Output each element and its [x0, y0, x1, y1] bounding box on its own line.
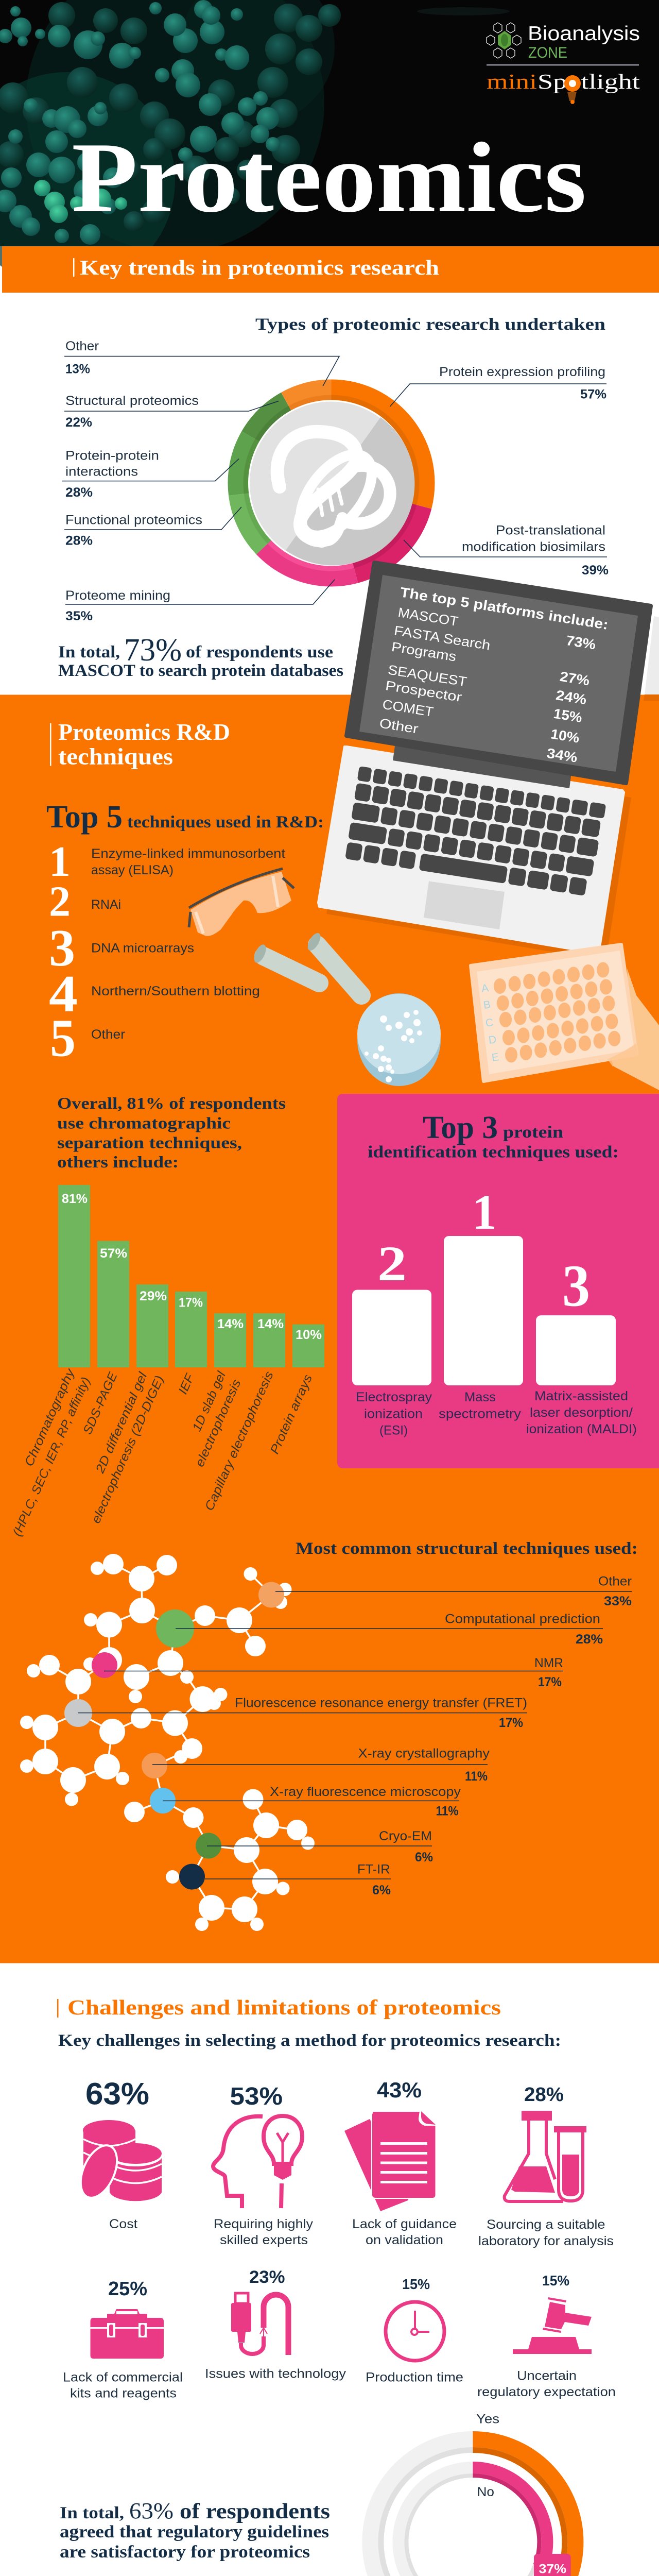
- screen text: top 5 platforms: FASTA Search: [393, 622, 492, 653]
- section heading: R&D techniques: techniques: [58, 744, 173, 770]
- badge: 37%: 37%: [539, 2562, 566, 2576]
- label: Functional proteomics 28%: 28%: [65, 534, 93, 548]
- list: top 5 techniques: 1: [49, 838, 71, 886]
- screen text: top 5 platforms: 34%: [546, 745, 579, 766]
- label: FRET 17%: 17%: [499, 1716, 523, 1730]
- heading: top 3: Top 3: [423, 1110, 498, 1145]
- icon: protein ribbon: [278, 432, 390, 548]
- icon: safety goggles: [189, 869, 294, 936]
- callout: 73% use MASCOT: MASCOT to search protein databases: [58, 662, 343, 680]
- logo: Bioanalysis Zone miniSpotlight: Sp tlight: [537, 70, 640, 93]
- rotated bar labels: SDS-PAGE: [80, 1370, 120, 1436]
- podium labels: ionization (MALDI): [526, 1422, 637, 1436]
- screen text: top 5 platforms: The top 5 platforms include:: [399, 584, 610, 633]
- screen text: top 5 platforms: 73%: [565, 633, 597, 653]
- list: top 5 techniques: 3: [49, 919, 75, 977]
- label: Other 33%: Other: [598, 1574, 632, 1589]
- label: Other 33%: 33%: [604, 1594, 632, 1608]
- callout: 73% use MASCOT: of respondents use: [186, 643, 333, 662]
- rotated bar labels: (HPLC, SEC, IER, RP, affinity): [10, 1375, 93, 1538]
- chart: concentric ring yes/no: [367, 2412, 576, 2576]
- label: Protein expression profiling 57%: Protein expression profiling: [439, 365, 605, 379]
- text: 81% use chromatographic separation: Overall, 81% of respondents: [57, 1094, 286, 1112]
- rotated bar labels: electrophoresis: [193, 1377, 244, 1469]
- logo: Bioanalysis Zone miniSpotlight: [487, 23, 640, 104]
- label: Computational prediction 28%: Computational prediction: [445, 1612, 600, 1626]
- label: FT-IR 6%: FT-IR: [357, 1862, 390, 1876]
- screen text: top 5 platforms: 24%: [555, 687, 587, 707]
- laptop base: [318, 747, 624, 954]
- label: X-ray fluorescence microscopy 11%: X-ray fluorescence microscopy: [270, 1785, 461, 1799]
- logo: Bioanalysis Zone miniSpotlight: ZONE: [528, 44, 567, 61]
- podium labels: (ESI): [379, 1423, 408, 1437]
- label: NMR 17%: 17%: [538, 1675, 562, 1689]
- bar values: 14%: [217, 1317, 244, 1331]
- icon: broken cable: [231, 2293, 288, 2355]
- well plate row letters: D: [488, 1033, 497, 1046]
- podium labels: [356, 1389, 637, 1437]
- icon: hand holding well plate: [471, 944, 659, 1090]
- challenge: regulatory expectation 15%: 15%: [542, 2273, 569, 2289]
- screen text: top 5 platforms: Programs: [390, 639, 457, 664]
- rotated bar labels: Protein arrays: [268, 1372, 315, 1456]
- label: Computational prediction 28%: [176, 1612, 603, 1647]
- heading: top 3: protein: [503, 1123, 563, 1142]
- challenge: sourcing laboratory 28%: Sourcing a suitable: [487, 2217, 605, 2232]
- label: Proteome mining 35%: 35%: [65, 609, 93, 623]
- rotated bar labels: Chromatography: [22, 1366, 78, 1468]
- podium numbers: [377, 1184, 590, 1319]
- challenge: regulatory expectation 15%: Uncertain: [517, 2369, 577, 2383]
- podium labels: Electrospray: [356, 1390, 432, 1404]
- label: Other 13%: Other: [65, 339, 99, 353]
- panel: top 3 protein identification: [337, 1094, 659, 1468]
- label: FRET 17%: [78, 1696, 527, 1730]
- label: X-ray crystallography 11%: X-ray crystallography: [358, 1747, 490, 1761]
- icon: flask and test tube: [505, 2111, 586, 2201]
- label: Cryo-EM 6%: 6%: [415, 1850, 433, 1865]
- podium numbers: 3: [562, 1253, 590, 1319]
- screen text: top 5 platforms: MASCOT: [397, 604, 459, 629]
- heading: top 5 techniques: techniques used in R&D:: [127, 813, 324, 832]
- challenge: production time 15%: Production time: [366, 2370, 463, 2384]
- challenge: commercial kits 25%: [63, 2278, 183, 2401]
- rotated bar labels: [10, 1366, 315, 1538]
- label: NMR 17%: NMR: [534, 1656, 563, 1670]
- podium labels: Matrix-assisted: [534, 1389, 628, 1403]
- screen text: top 5 platforms: Prospector: [384, 677, 463, 705]
- callout: 63% regulatory guidelines: agreed that regulatory guidelines: [60, 2522, 329, 2541]
- text: 81% use chromatographic separation: use chromatographic: [57, 1114, 231, 1132]
- logo: Bioanalysis Zone miniSpotlight: Bioanalysis: [528, 23, 640, 45]
- section heading: R&D techniques: [50, 719, 230, 770]
- heading: top 3: [368, 1110, 619, 1161]
- label: Structural proteomics 22%: 22%: [65, 415, 92, 430]
- screen text: top 5 platforms: 15%: [552, 706, 583, 725]
- rotated bar labels: IEF: [176, 1371, 197, 1396]
- label: Proteome mining 35%: Proteome mining: [65, 588, 170, 603]
- callout: 63% regulatory guidelines: [60, 2498, 330, 2562]
- laptop keyboard: [345, 766, 606, 897]
- bar values: 81%: [62, 1192, 88, 1206]
- bar values: 10%: [296, 1328, 322, 1342]
- list: top 5 techniques: DNA microarrays: [91, 941, 194, 955]
- podium numbers: 1: [472, 1184, 497, 1240]
- list: top 5 techniques: 2: [49, 878, 71, 926]
- section heading: challenges and limitations: Challenges and limitations of proteomics: [67, 1995, 501, 2019]
- list: top 5 techniques: RNAi: [91, 897, 121, 912]
- challenge: lack of guidance 43%: on validation: [366, 2233, 443, 2247]
- screen text: top 5 platforms: COMET: [381, 697, 435, 720]
- challenge: production time 15%: 15%: [402, 2276, 430, 2292]
- callout: 63% regulatory guidelines: 63%: [129, 2498, 174, 2523]
- illustration: laptop: [318, 563, 659, 961]
- rotated bar labels: 2D differential gel: [93, 1370, 150, 1476]
- label: Post-translational modification 39%: [404, 523, 609, 578]
- list: top 5 techniques: Northern/Southern blotting: [91, 984, 260, 998]
- list: top 5 techniques: [49, 838, 285, 1067]
- label: Protein-protein interactions 28%: [62, 448, 239, 500]
- well plate row letters: C: [484, 1016, 494, 1029]
- bar values: 29%: [140, 1289, 167, 1303]
- screen text: top 5 platforms: SEAQUEST: [387, 662, 468, 689]
- challenge: cost 63%: 63%: [85, 2076, 149, 2111]
- well plate wells: [494, 962, 620, 1062]
- challenge: skilled experts 53%: 53%: [230, 2083, 283, 2110]
- ring label: No: No: [477, 2485, 494, 2499]
- label: Protein-protein interactions 28%: interactions: [65, 465, 138, 479]
- label: FT-IR 6%: 6%: [372, 1883, 391, 1897]
- label: Post-translational modification 39%: 39%: [582, 563, 609, 578]
- challenge: commercial kits 25%: Lack of commercial: [63, 2370, 183, 2384]
- ring label: Yes: Yes: [476, 2412, 499, 2426]
- challenge: sourcing laboratory 28%: 28%: [524, 2084, 564, 2106]
- section band: key trends: Key trends in proteomics research: [80, 256, 439, 279]
- callout: 63% regulatory guidelines: are satisfactory for proteomics: [60, 2543, 310, 2562]
- section heading: R&D techniques: Proteomics R&D: [58, 719, 230, 745]
- laptop hinge: [393, 746, 571, 788]
- icon: clock: [386, 2302, 444, 2361]
- text: 81% use chromatographic separation: others include:: [57, 1153, 179, 1171]
- screen text: top 5 platforms: Other: [378, 715, 420, 737]
- label: FRET 17%: Fluorescence resonance energy transfer (FRET): [235, 1696, 527, 1710]
- label: Functional proteomics 28%: Functional proteomics: [65, 513, 202, 528]
- challenge: lack of guidance 43%: Lack of guidance: [352, 2217, 457, 2231]
- challenge: commercial kits 25%: 25%: [108, 2278, 147, 2300]
- label: Structural proteomics 22%: [64, 394, 279, 430]
- icon: gavel: [513, 2297, 592, 2354]
- challenge: lack of guidance 43%: 43%: [377, 2078, 422, 2102]
- challenge: cost 63%: Cost: [109, 2217, 137, 2231]
- screen text: top 5 platforms: [378, 584, 610, 767]
- molecule coloured atoms: [64, 1582, 284, 1890]
- well plate row letters: A: [480, 982, 490, 995]
- challenge: issues with technology 23%: 23%: [249, 2267, 285, 2287]
- callout: 73% use MASCOT: 73%: [124, 633, 182, 668]
- callout: 73% use MASCOT: In total,: [58, 643, 120, 662]
- label: Protein expression profiling 57%: 57%: [580, 387, 606, 402]
- molecule white atoms: [20, 1554, 315, 1931]
- well plate row letters: B: [482, 998, 492, 1011]
- hero header panel: [0, 0, 659, 289]
- label: X-ray crystallography 11%: 11%: [465, 1769, 488, 1784]
- callout: 73% use MASCOT: [58, 633, 343, 680]
- label: X-ray fluorescence microscopy 11%: 11%: [436, 1804, 458, 1819]
- bar chart: separation techniques: [10, 1185, 324, 1538]
- bar values: 17%: [179, 1296, 203, 1310]
- list: top 5 techniques: 4: [49, 964, 78, 1023]
- illustration: molecule chain: [20, 1554, 315, 1931]
- challenge: regulatory expectation 15%: regulatory expectation: [477, 2385, 616, 2399]
- challenge: commercial kits 25%: kits and reagents: [70, 2386, 177, 2401]
- label: Other 13%: 13%: [65, 362, 90, 377]
- subheading: key challenges: Key challenges in selecting a method for proteomics research:: [58, 2031, 561, 2050]
- challenge: cost 63%: [74, 2076, 163, 2231]
- label: Computational prediction 28%: 28%: [576, 1632, 603, 1647]
- label: Cryo-EM 6%: Cryo-EM: [379, 1829, 432, 1843]
- challenge: sourcing laboratory 28%: laboratory for analysis: [478, 2234, 614, 2248]
- list: top 5 techniques: assay (ELISA): [91, 863, 174, 877]
- challenge: sourcing laboratory 28%: [478, 2084, 614, 2248]
- heading: top 3: identification techniques used:: [368, 1143, 619, 1161]
- label: Protein-protein interactions 28%: Protein-protein: [65, 448, 159, 463]
- challenge: skilled experts 53%: Requiring highly: [214, 2217, 314, 2231]
- badge: 37%: [534, 2554, 571, 2576]
- podium numbers: 2: [377, 1236, 407, 1291]
- challenge: issues with technology 23%: Issues with technology: [205, 2367, 346, 2381]
- icon: coins: [74, 2120, 163, 2204]
- hero molecule cloud: [0, 0, 510, 289]
- challenge: production time 15%: [366, 2276, 463, 2384]
- label: Cryo-EM 6%: [207, 1829, 433, 1865]
- icon: documents: [344, 2111, 437, 2211]
- label: Structural proteomics 22%: Structural proteomics: [65, 394, 199, 408]
- challenge: regulatory expectation 15%: [477, 2273, 616, 2399]
- list: top 5 techniques: 5: [50, 1009, 76, 1067]
- icon: head with lightbulb: [213, 2116, 302, 2208]
- main title: Proteomics: [72, 122, 586, 233]
- label: NMR 17%: [104, 1656, 563, 1689]
- label: X-ray crystallography 11%: [152, 1747, 490, 1784]
- icon: test tubes: [252, 931, 361, 995]
- list: top 5 techniques: Enzyme-linked immunosorbent: [91, 846, 285, 861]
- challenge: skilled experts 53%: [213, 2083, 314, 2247]
- text: 81% use chromatographic separation: [57, 1094, 286, 1171]
- bar values: [62, 1192, 322, 1342]
- section band: key trends: [2, 246, 659, 293]
- screen text: top 5 platforms: 10%: [550, 726, 581, 746]
- heading: top 5 techniques: Top 5: [46, 800, 123, 835]
- label: Other 13%: [64, 339, 339, 386]
- podium labels: ionization: [364, 1407, 423, 1421]
- well plate row letters: E: [491, 1051, 500, 1064]
- heading: most common structural techniques: Most common structural techniques used:: [296, 1539, 638, 1558]
- icon: toolbox: [91, 2309, 164, 2359]
- podium labels: laser desorption/: [530, 1405, 633, 1420]
- panel: orange R&D section background: [0, 694, 659, 1963]
- challenge: lack of guidance 43%: [344, 2078, 457, 2247]
- rotated bar labels: electrophoresis (2D-DIGE): [89, 1374, 167, 1526]
- label: X-ray fluorescence microscopy 11%: [163, 1785, 461, 1819]
- rotated bar labels: 1D slab gel: [190, 1369, 229, 1433]
- list: top 5 techniques: Other: [91, 1027, 125, 1042]
- donut chart: types of proteomic research: [200, 351, 463, 615]
- podium labels: Mass: [464, 1390, 496, 1404]
- label: Protein-protein interactions 28%: 28%: [65, 485, 93, 500]
- podium labels: spectrometry: [439, 1407, 522, 1421]
- label: Proteome mining 35%: [65, 580, 335, 623]
- callout: 63% regulatory guidelines: In total,: [60, 2504, 124, 2522]
- bars: [58, 1185, 324, 1367]
- label: Other 33%: [275, 1574, 632, 1608]
- label: Protein expression profiling 57%: [390, 365, 606, 406]
- challenge: issues with technology 23%: [205, 2267, 346, 2381]
- label: Functional proteomics 28%: [64, 507, 241, 548]
- heading: top 5 techniques: [46, 800, 324, 835]
- challenge: skilled experts 53%: skilled experts: [220, 2233, 308, 2247]
- text: 81% use chromatographic separation: separation techniques,: [57, 1133, 242, 1152]
- label: FT-IR 6%: [205, 1862, 391, 1897]
- molecule bonds: [45, 1564, 297, 1924]
- donut labels: [62, 339, 609, 623]
- label: Post-translational modification 39%: Post-translational: [496, 523, 605, 538]
- screen text: top 5 platforms: 27%: [559, 669, 591, 689]
- bar values: 14%: [257, 1317, 284, 1331]
- rotated bar labels: Capillary electrophoresis: [202, 1369, 276, 1513]
- heading: types of research: Types of proteomic research undertaken: [255, 315, 605, 334]
- bar values: 57%: [100, 1246, 127, 1261]
- structural technique labels: [78, 1574, 632, 1897]
- laptop screen: [346, 563, 651, 783]
- laptop trackpad: [424, 881, 505, 929]
- label: Post-translational modification 39%: modification biosimilars: [462, 540, 605, 554]
- logo: Bioanalysis Zone miniSpotlight: mini: [487, 70, 537, 93]
- podium blocks: [352, 1236, 616, 1385]
- callout: 63% regulatory guidelines: of respondents: [180, 2500, 330, 2523]
- well plate row letters: [480, 982, 500, 1064]
- icon: petri dish: [357, 993, 441, 1086]
